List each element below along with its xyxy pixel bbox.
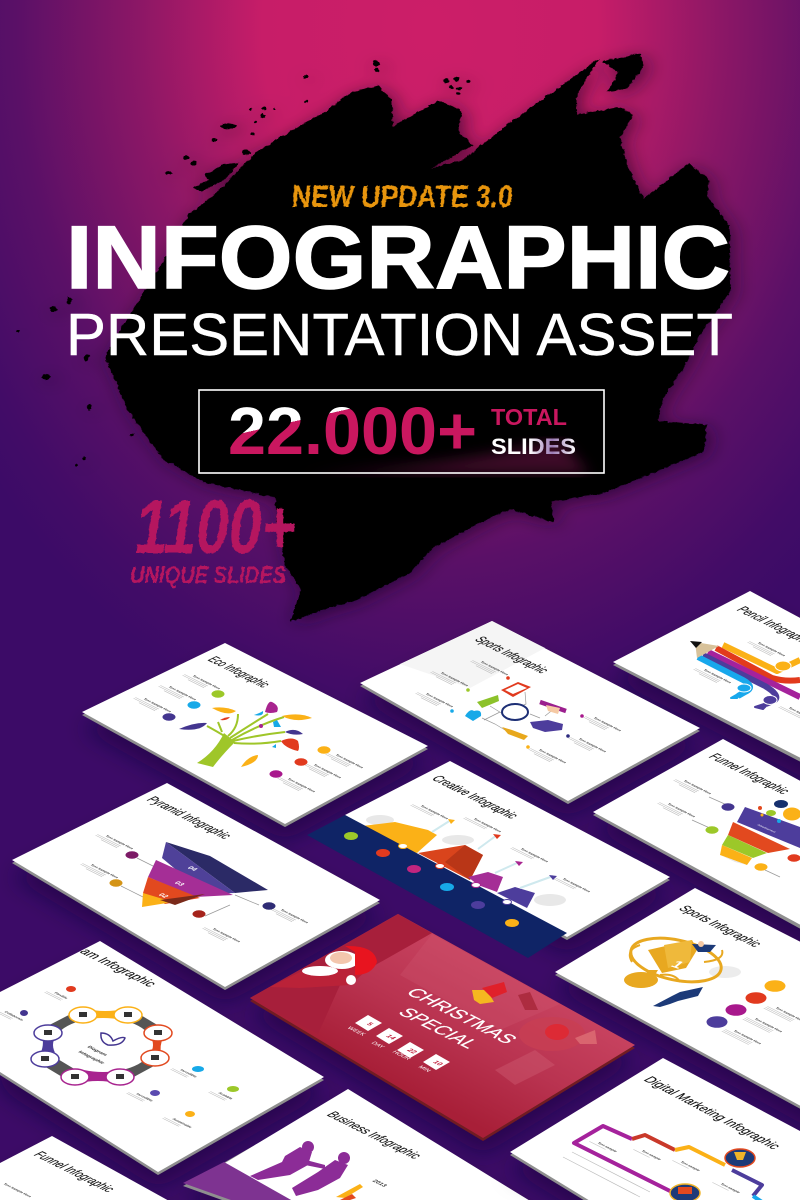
feature labels: Flexible <box>53 992 69 999</box>
slide: eco infographic: Text Sample Here <box>312 764 343 779</box>
heading: christmas special: SPECIAL <box>393 1006 483 1051</box>
slide: sports infographic: Text Sample Here <box>439 672 470 687</box>
icon: cloud <box>709 966 741 978</box>
background magenta glow <box>0 0 800 760</box>
slide: eco infographic: Text Sample Here <box>334 754 365 769</box>
stats box: total slides: TOTAL <box>491 404 567 430</box>
silhouettes <box>250 1141 350 1196</box>
chart: pyramid layers <box>142 842 268 907</box>
slide: funnel infographic small <box>0 1136 180 1200</box>
dark red santa area <box>250 914 432 1034</box>
icon: pencil arrows <box>690 641 800 709</box>
chart: pyramid layers: 04 <box>185 866 199 872</box>
icon: trophy <box>624 931 725 1007</box>
feature labels: Scalable <box>217 1092 234 1100</box>
diagram ring: Diagram <box>85 1045 109 1057</box>
slide: creative infographic: Text Sample Here <box>519 848 550 863</box>
slide: pyramid infographic: Text Sample Here <box>104 835 135 850</box>
slide: sports infographic: Text Sample Here <box>577 738 608 753</box>
feature labels: Incredible <box>135 1093 154 1102</box>
purple band <box>183 1162 300 1200</box>
callout: unique slides: 1100+ <box>135 485 296 570</box>
feature labels: Sustainable <box>171 1118 193 1128</box>
icons: mountains <box>362 819 557 908</box>
slide: creative infographic <box>307 761 670 958</box>
bell icon <box>472 982 507 1004</box>
slide: funnel infographic: Text Sample Here <box>666 803 697 818</box>
title: infographic: INFOGRAPHIC <box>66 207 730 307</box>
countdown: 5 <box>364 1022 374 1027</box>
slide: christmas special <box>250 914 635 1141</box>
slide: creative infographic: Creative Infographic <box>428 773 523 820</box>
stepped path <box>574 1126 762 1200</box>
bar chart: 2013 <box>370 1179 388 1188</box>
slide: sports infographic: Text Sample Here <box>479 661 510 676</box>
icon: store badge <box>670 1184 700 1200</box>
icon: sports diagram <box>465 682 566 740</box>
band markers <box>344 832 519 927</box>
knit pattern area <box>400 934 560 1030</box>
slide: eco infographic <box>82 643 428 827</box>
magenta glow streak inside stats box <box>300 440 590 474</box>
slide: trophy sports infographic <box>555 888 800 1125</box>
slide: pyramid infographic: Pyramid Infographic <box>143 794 236 840</box>
slide: digital marketing infographic: Text sample <box>719 1183 741 1194</box>
slide: eco infographic: Eco Infographic <box>204 654 274 689</box>
icon: cloud <box>442 835 474 845</box>
slide: digital marketing infographic: Text sample <box>640 1150 662 1161</box>
slide: eco infographic: Text Sample Here <box>191 675 222 690</box>
chart: pyramid layers: 03 <box>172 881 186 887</box>
slide: sports infographic <box>360 621 700 804</box>
slide: sports infographic: Text Sample Here <box>424 693 455 708</box>
slide: sports infographic: Text Sample Here <box>592 717 623 732</box>
slide: sports infographic: Text Sample Here <box>537 749 568 764</box>
slide: digital marketing infographic <box>510 1058 800 1200</box>
slide: sports infographic: Sports Infographic <box>471 634 553 675</box>
slide: eco infographic: Text Sample Here <box>167 686 198 701</box>
slide: business infographic <box>183 1089 540 1200</box>
icon: cloud <box>534 894 566 906</box>
countdown: 22 <box>405 1048 418 1055</box>
countdown <box>345 1015 450 1073</box>
slide: eco infographic: Text Sample Here <box>142 698 173 713</box>
slide: diagram infographic <box>0 941 324 1175</box>
slide: digital marketing infographic: Text sample <box>679 1161 701 1172</box>
countdown: 14 <box>384 1034 397 1041</box>
stats box: total slides <box>199 390 604 473</box>
feature labels: Collaborate <box>3 1011 24 1021</box>
callout: unique slides: UNIQUE SLIDES <box>130 562 286 589</box>
navy band <box>307 815 567 958</box>
slide: funnel infographic <box>593 739 800 945</box>
countdown: DAY <box>369 1041 385 1049</box>
icon: funnel <box>720 800 800 865</box>
countdown: HOUR <box>390 1050 412 1061</box>
slide: trophy sports infographic: Text Sample Here <box>753 1018 784 1033</box>
icon: cloud <box>366 815 394 825</box>
black brush stroke <box>16 54 731 622</box>
feature labels: Incredible <box>179 1069 198 1078</box>
icon: tree <box>179 702 312 767</box>
santa <box>270 946 377 988</box>
icon: trophy: 1 <box>667 959 687 971</box>
slide: pyramid infographic: Text Sample Here <box>211 928 242 943</box>
slide: pyramid infographic: Text Sample Here <box>279 909 310 924</box>
slide: trophy sports infographic: Sports Infographic <box>675 903 766 949</box>
slide: funnel infographic: Text Sample Here <box>682 780 713 795</box>
icon: funnel: Advertisement <box>756 824 777 833</box>
stats box: total slides: SLIDES <box>491 434 576 459</box>
subtitle: new update: NEW UPDATE 3.0 <box>290 179 514 214</box>
subtitle: presentation asset: PRESENTATION ASSET <box>66 302 733 368</box>
callout: unique slides <box>130 485 296 589</box>
slide: pencil infographic <box>613 591 800 777</box>
diagram ring: Infographic <box>76 1050 106 1065</box>
heading: christmas special: CHRISTMAS <box>401 986 522 1046</box>
slide: business infographic: Business Infographic <box>323 1109 426 1160</box>
stats box: total slides: 22.000+ <box>228 394 477 469</box>
slide: creative infographic: Text Sample Here <box>472 818 503 833</box>
countdown: 10 <box>431 1060 444 1067</box>
slide: creative infographic: Text Sample Here <box>419 805 450 820</box>
slide: funnel infographic small: Text Sample Here <box>2 1183 33 1198</box>
bar chart <box>336 1179 388 1200</box>
slide: pyramid infographic <box>12 783 380 990</box>
feature labels <box>0 986 239 1130</box>
slide: trophy sports infographic: Text Sample Here <box>732 1030 763 1045</box>
slide: creative infographic: Text Sample Here <box>561 878 592 893</box>
countdown: WEEK <box>345 1026 366 1037</box>
countdown: MIN <box>416 1065 431 1073</box>
slide: eco infographic: Text Sample Here <box>286 778 317 793</box>
slide: pencil infographic: Text Sample Here <box>756 642 787 657</box>
diagram ring <box>31 1007 172 1085</box>
reindeer <box>495 992 597 1085</box>
slide: pyramid infographic: Text Sample Here <box>89 864 120 879</box>
slide: diagram infographic: am Infographic <box>76 946 161 988</box>
chart: pyramid layers: 02 <box>156 893 170 899</box>
slide: digital marketing infographic: Text sample <box>596 1142 618 1153</box>
icon: trophy badge <box>725 1149 755 1167</box>
slide: pencil infographic: Text Sample Here <box>702 669 733 684</box>
